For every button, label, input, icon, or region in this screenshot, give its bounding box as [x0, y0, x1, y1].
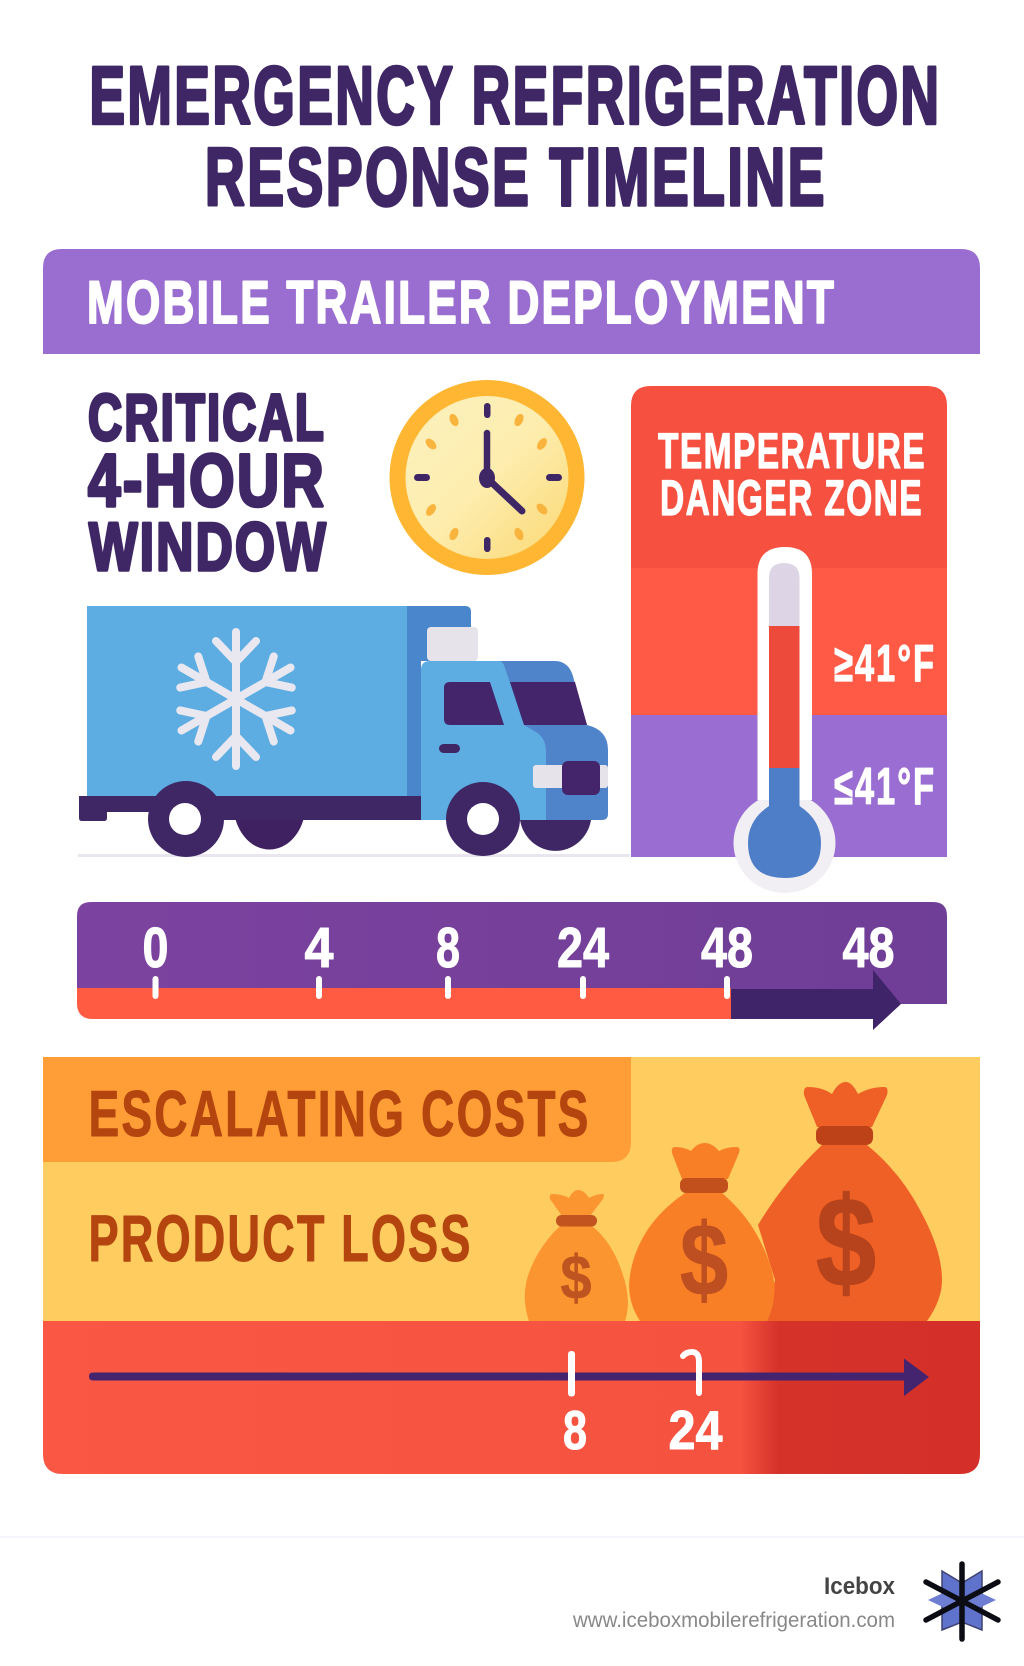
grille [562, 761, 600, 795]
timeline ticks [152, 976, 730, 999]
timeline hour labels: 0 [142, 916, 168, 980]
timeline hour labels: 8 [436, 916, 460, 980]
chart: response timeline bar [77, 902, 947, 1030]
heading: escalating costs: ESCALATING COSTS [88, 1077, 590, 1150]
title [90, 50, 941, 223]
clock hour marks [414, 403, 562, 552]
clock minor marks [424, 412, 549, 542]
cab body [421, 661, 546, 820]
icon: medium money bag: $ [680, 1203, 728, 1317]
tick: 24 hours [683, 1352, 699, 1393]
clock hands [479, 433, 522, 511]
danger zone heading [658, 423, 926, 526]
timeline hour labels: 24 [557, 916, 609, 980]
footer divider [0, 1536, 1024, 1538]
wind deflector [427, 627, 478, 661]
arrow: loss timeline axis [89, 1358, 929, 1396]
timeline hour labels: 48 [701, 916, 753, 980]
chassis [79, 796, 421, 821]
heading: critical 4-hour window: 4-HOUR [88, 439, 326, 522]
timeline hour labels: 4 [304, 916, 334, 980]
side window [444, 682, 504, 725]
heading: critical 4-hour window: CRITICAL [88, 380, 326, 454]
icon: medium money bag [629, 1143, 775, 1321]
cargo box [87, 606, 407, 797]
label: 24 hours: 24 [668, 1399, 723, 1461]
ground shadow [78, 854, 630, 857]
tick: 8 hours [568, 1351, 575, 1396]
panel: temperature danger zone [631, 386, 947, 857]
timeline hour labels [142, 916, 894, 980]
icon: large money bag [758, 1082, 942, 1321]
panel: loss timeline [43, 1321, 980, 1474]
front wheel [446, 782, 520, 856]
costs header block [43, 1057, 631, 1162]
rear hidden wheel [234, 812, 305, 850]
cargo box side [407, 606, 471, 797]
windshield [510, 682, 587, 725]
label: 8 hours: 8 [563, 1399, 587, 1461]
heading: critical 4-hour window: WINDOW [89, 509, 328, 585]
icon: refrigerated truck [78, 606, 630, 857]
icon: icebox logo [926, 1564, 998, 1639]
rear wheel [148, 781, 224, 857]
footer brand name: Icebox [824, 1573, 896, 1600]
icon: large money bag: $ [816, 1171, 876, 1313]
cab hood [497, 661, 608, 820]
heading: product loss: PRODUCT LOSS [88, 1201, 472, 1275]
door handle [439, 744, 460, 753]
heading: critical 4-hour window [88, 380, 328, 585]
timeline arrow [731, 970, 901, 1030]
timeline hour labels: 48 [842, 916, 894, 980]
panel: escalating costs [43, 1057, 980, 1321]
bumper [533, 765, 608, 788]
label: below 41F: ≤41°F [834, 758, 936, 816]
footer website: www.iceboxmobilerefrigeration.com [572, 1608, 895, 1632]
icon: small money bag: $ [560, 1244, 592, 1313]
icon: clock [390, 380, 584, 575]
label: above 41F: ≥41°F [834, 635, 936, 693]
icon: thermometer [734, 547, 836, 893]
panel: mobile trailer deployment banner [43, 249, 980, 354]
snowflake [172, 632, 300, 766]
icon: small money bag [525, 1190, 628, 1321]
front hidden wheel [520, 820, 591, 851]
